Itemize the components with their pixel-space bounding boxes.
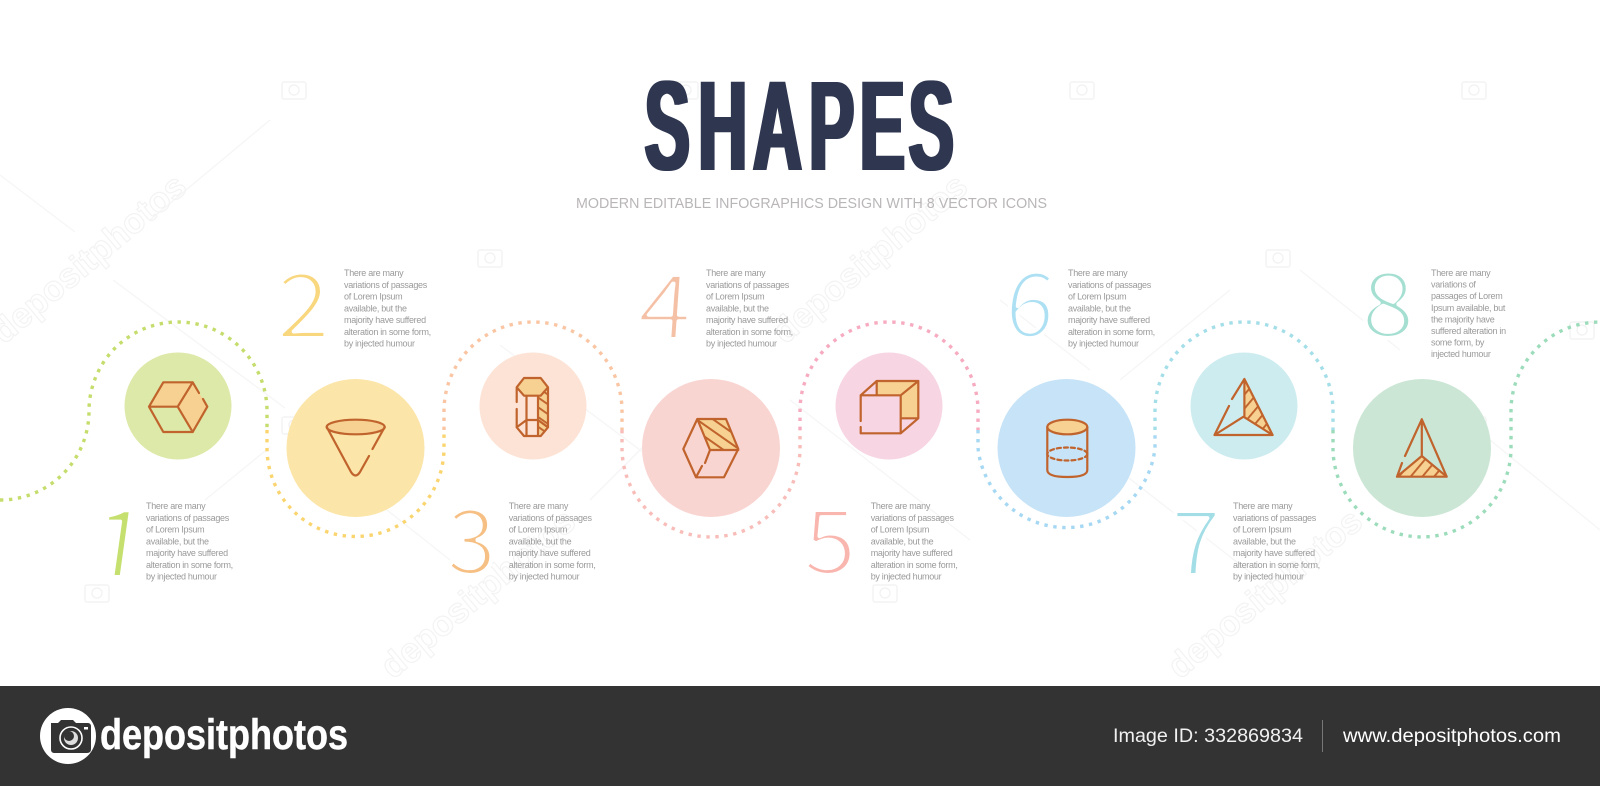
circle 1 — [124, 352, 232, 460]
step 6 — [998, 232, 1155, 517]
text 6: available, but the — [1068, 303, 1131, 313]
text 2: available, but the — [344, 303, 407, 313]
text 8: some form, by — [1431, 338, 1485, 348]
text 8: the majority have — [1431, 314, 1495, 324]
text 5: available, but the — [871, 536, 934, 546]
step 8 — [1353, 232, 1506, 517]
text 3: by injected humour — [509, 572, 580, 582]
dotted wave connector — [0, 322, 1600, 537]
number 3: 3 — [447, 470, 496, 600]
icon: cylinder — [1047, 420, 1087, 477]
text 5: There are many — [871, 501, 931, 511]
text 1: of Lorem Ipsum — [146, 524, 204, 534]
text 2: There are many — [344, 268, 404, 278]
text 2: of Lorem Ipsum — [344, 292, 402, 302]
text 4: majority have suffered — [706, 315, 788, 325]
icon: pyramid with hatched side — [1214, 379, 1273, 435]
icon: camera logo — [40, 708, 96, 764]
website: www.depositphotos.com — [1342, 725, 1561, 747]
text 8: passages of Lorem — [1431, 291, 1502, 301]
text 6: variations of passages — [1068, 280, 1152, 290]
text 4: variations of passages — [706, 280, 790, 290]
text 7: of Lorem Ipsum — [1233, 524, 1291, 534]
text 7: by injected humour — [1233, 572, 1304, 582]
text 3: majority have suffered — [509, 548, 591, 558]
step 2 — [277, 233, 431, 517]
text 1: by injected humour — [146, 572, 217, 582]
text 1: available, but the — [146, 536, 209, 546]
text 6: by injected humour — [1068, 338, 1139, 348]
text 2: variations of passages — [344, 280, 428, 290]
text 3: available, but the — [509, 536, 572, 546]
circle 8 — [1353, 379, 1491, 517]
text 2: majority have suffered — [344, 315, 426, 325]
text 1: alteration in some form, — [146, 560, 233, 570]
text 7: There are many — [1233, 501, 1293, 511]
watermark layer — [0, 82, 1600, 686]
number 2: 2 — [277, 233, 330, 364]
text 8: injected humour — [1431, 349, 1491, 359]
watermark layer: depositphotos — [373, 501, 583, 686]
circle 7 — [1190, 352, 1298, 460]
text 6: There are many — [1068, 268, 1128, 278]
text 5: of Lorem Ipsum — [871, 524, 929, 534]
step 7 — [1171, 352, 1320, 601]
circle 2 — [286, 379, 424, 517]
footer bar — [0, 686, 1600, 786]
text 4: of Lorem Ipsum — [706, 292, 764, 302]
number 6: 6 — [1001, 232, 1060, 363]
divider — [1322, 720, 1323, 752]
icon: open box — [861, 381, 918, 433]
title: SHAPES — [645, 54, 954, 197]
text 1: majority have suffered — [146, 548, 228, 558]
icon: hexagonal block — [683, 419, 738, 477]
number 4: 4 — [634, 235, 697, 366]
text 3: There are many — [509, 501, 569, 511]
text 7: available, but the — [1233, 536, 1296, 546]
circle 6 — [998, 379, 1136, 517]
icon: pyramid with hatched base — [1397, 419, 1447, 477]
step 1 — [109, 352, 232, 582]
text 7: majority have suffered — [1233, 548, 1315, 558]
text 6: of Lorem Ipsum — [1068, 292, 1126, 302]
icon: cube — [149, 382, 207, 432]
step 4 — [634, 235, 793, 517]
image id: Image ID: 332869834 — [1113, 725, 1303, 747]
text 8: suffered alteration in — [1431, 326, 1506, 336]
text 5: by injected humour — [871, 572, 942, 582]
text 4: available, but the — [706, 303, 769, 313]
text 2: by injected humour — [344, 338, 415, 348]
text 4: There are many — [706, 268, 766, 278]
step 5 — [803, 352, 958, 600]
text 8: Ipsum available, but — [1431, 303, 1506, 313]
number 7: 7 — [1171, 471, 1221, 601]
text 8: variations of — [1431, 280, 1476, 290]
number 5: 5 — [803, 469, 857, 600]
text 6: majority have suffered — [1068, 315, 1150, 325]
circle 4 — [642, 379, 780, 517]
text 8: There are many — [1431, 268, 1491, 278]
text 3: alteration in some form, — [509, 560, 596, 570]
icon: hexagonal prism — [517, 378, 548, 436]
watermark layer: depositphotos — [1160, 501, 1370, 686]
text 6: alteration in some form, — [1068, 327, 1155, 337]
circle 3 — [480, 352, 586, 460]
text 5: majority have suffered — [871, 548, 953, 558]
text 7: variations of passages — [1233, 513, 1317, 523]
text 5: variations of passages — [871, 513, 954, 523]
text 7: alteration in some form, — [1233, 560, 1320, 570]
logo wordmark: depositphotos — [100, 711, 348, 759]
subtitle: MODERN EDITABLE INFOGRAPHICS DESIGN WITH 8 VECTOR ICONS — [576, 196, 1047, 212]
text 4: by injected humour — [706, 338, 777, 348]
number 1: 1 — [81, 465, 159, 613]
text 4: alteration in some form, — [706, 327, 793, 337]
text 3: of Lorem Ipsum — [509, 524, 567, 534]
circle 5 — [836, 352, 942, 460]
text 2: alteration in some form, — [344, 327, 431, 337]
step 3 — [447, 352, 596, 600]
text 1: variations of passages — [146, 513, 230, 523]
text 3: variations of passages — [509, 513, 592, 523]
text 1: There are many — [146, 501, 206, 511]
icon: cone — [327, 420, 385, 476]
watermark layer: depositphotos — [765, 166, 975, 351]
text 5: alteration in some form, — [871, 560, 958, 570]
number 8: 8 — [1361, 232, 1415, 363]
